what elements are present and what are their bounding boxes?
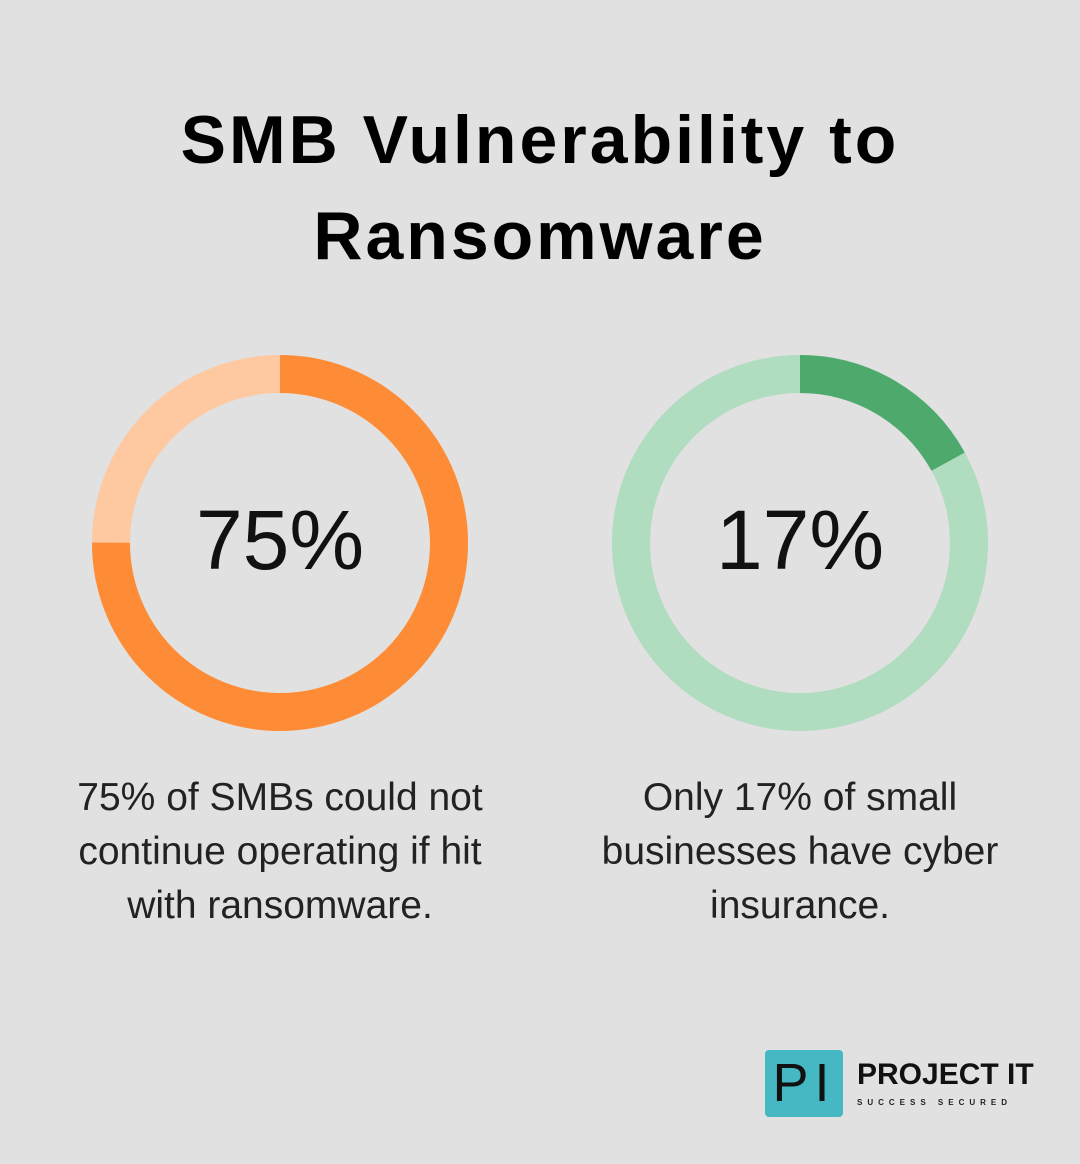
- text: 17% description: Only 17% of small businesses have cyber insurance.: [602, 776, 998, 927]
- logo: [765, 1050, 1034, 1117]
- donut chart: 75%: 75%: [196, 493, 364, 587]
- donut chart: 17%: [612, 355, 988, 731]
- title: SMB Vulnerability to: [181, 102, 899, 178]
- logo: PROJECT IT: [857, 1058, 1034, 1091]
- logo: PI: [772, 1053, 836, 1113]
- donut chart: 17%: 17%: [716, 493, 884, 587]
- donut chart: 75%: [92, 355, 468, 731]
- title: [181, 102, 899, 274]
- text: 75% description: 75% of SMBs could not continue operating if hit with ransomware.: [77, 776, 483, 927]
- title: Ransomware: [313, 198, 767, 274]
- logo: SUCCESS SECURED: [857, 1098, 1012, 1107]
